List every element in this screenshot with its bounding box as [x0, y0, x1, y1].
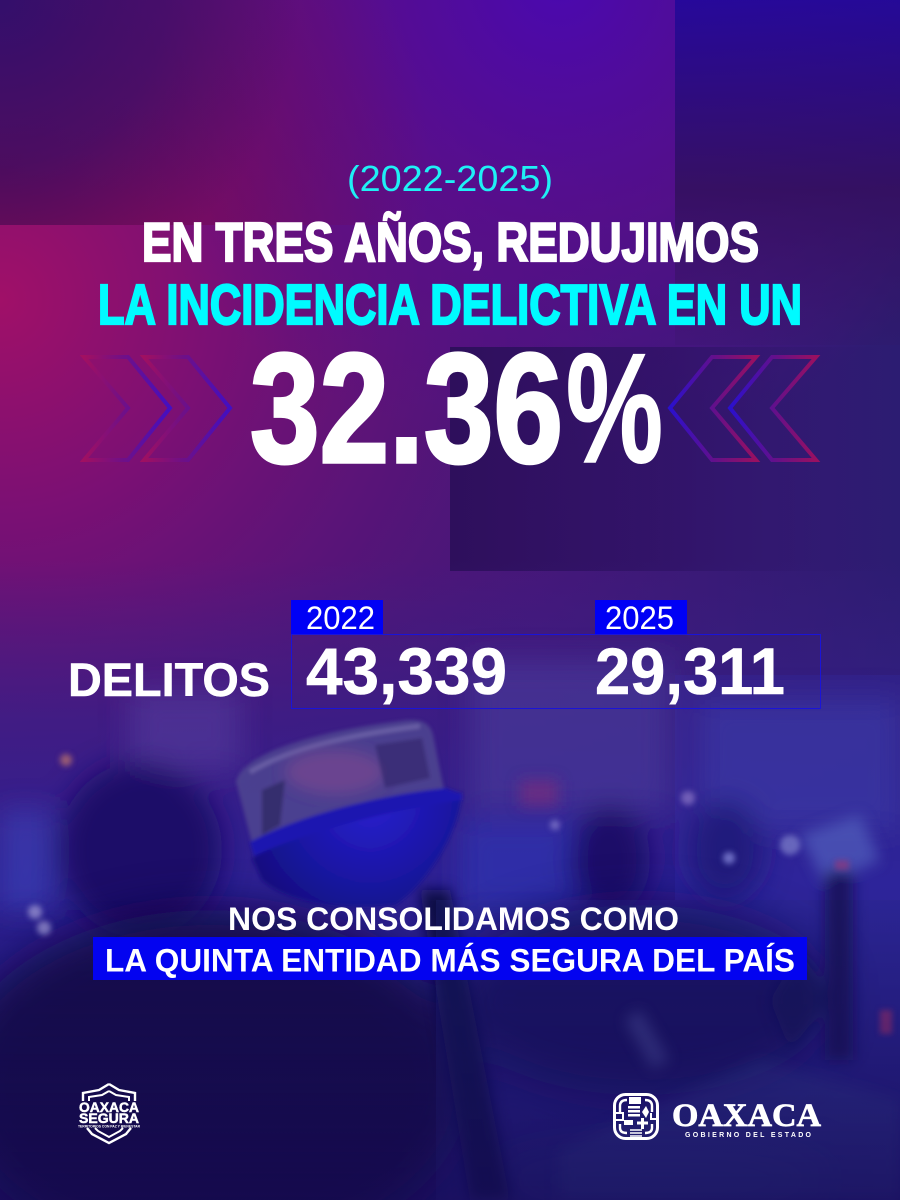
chevrons: right	[670, 357, 816, 460]
closing statement highlighted line: LA QUINTA ENTIDAD MÁS SEGURA DEL PAÍS	[105, 942, 795, 978]
emblem	[614, 1094, 658, 1138]
closing statement line 1: NOS CONSOLIDAMOS COMO	[228, 901, 679, 937]
background panel: top right	[675, 0, 900, 345]
background photo: police scene	[0, 560, 900, 1200]
data frame	[292, 634, 820, 708]
wordmark: OAXACA	[672, 1098, 821, 1134]
logo: Oaxaca Segura shield: OAXACA	[79, 1099, 139, 1115]
delitos label: DELITOS	[68, 653, 270, 706]
big percentage: 32.36	[250, 322, 563, 496]
value 2025: 29,311	[595, 634, 785, 708]
data panel: crimes	[68, 600, 820, 708]
lighter photo panel	[675, 675, 900, 900]
logo: Oaxaca Segura shield: TERRITORIOS CON PAZ Y BIENESTAR	[78, 1124, 141, 1128]
logo: Oaxaca Segura shield	[78, 1084, 141, 1143]
lower-right photo panel	[436, 900, 900, 1200]
logo: Oaxaca Segura shield: SEGURA	[79, 1110, 139, 1126]
big percentage: %	[566, 322, 663, 496]
year tag 2022: 2022	[306, 600, 375, 636]
chevrons: left	[84, 357, 230, 460]
police hat	[236, 720, 462, 907]
background panel: top left	[0, 0, 480, 225]
period label: (2022-2025)	[347, 158, 553, 199]
headline line 1: EN TRES AÑOS, REDUJIMOS	[142, 211, 759, 273]
value 2022: 43,339	[306, 634, 507, 708]
street lights	[28, 754, 892, 1034]
background panel: centre right	[450, 347, 900, 571]
year tag 2025: 2025	[605, 600, 674, 636]
logo: Gobierno de Oaxaca	[614, 1094, 821, 1139]
wordmark subtitle: GOBIERNO DEL ESTADO	[685, 1132, 812, 1139]
